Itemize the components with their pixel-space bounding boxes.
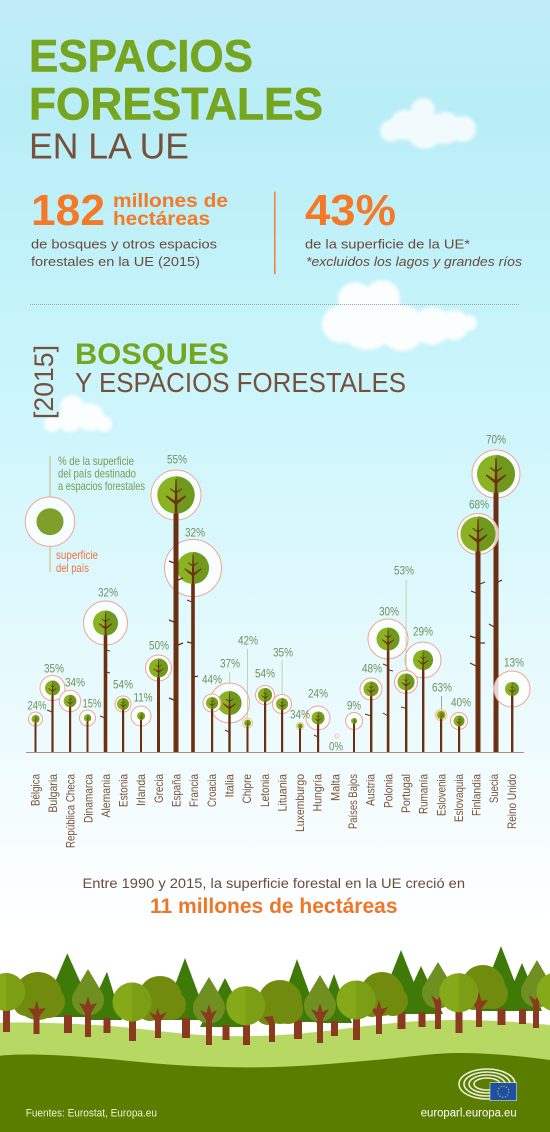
tree: Francia bbox=[164, 526, 222, 752]
tree: Malta bbox=[329, 734, 343, 754]
tree: Dinamarca bbox=[80, 696, 102, 752]
title: ESPACIOS bbox=[29, 31, 253, 82]
teardrop trees bbox=[72, 960, 550, 1024]
country labels: Malta bbox=[328, 774, 342, 801]
country labels: Eslovaquia bbox=[452, 774, 466, 822]
tree: Irlanda: 11% bbox=[134, 690, 153, 704]
country labels: Irlanda bbox=[134, 774, 148, 806]
tree: Dinamarca: 15% bbox=[82, 696, 102, 710]
country labels: Bélgica bbox=[28, 774, 42, 806]
chart: forest area by country bbox=[26, 432, 530, 754]
tree: Suecia bbox=[472, 432, 520, 752]
legend: del país destinado bbox=[58, 467, 136, 481]
tree: Alemania bbox=[84, 586, 128, 752]
stat: 182 millones: hectáreas bbox=[113, 209, 210, 230]
legend: del país bbox=[56, 561, 89, 575]
stat: 182 millones: 182 bbox=[31, 186, 105, 235]
cloud: middle bbox=[322, 280, 477, 351]
tree: Bélgica: 24% bbox=[28, 698, 47, 712]
tree: Letonia bbox=[255, 666, 275, 752]
country labels: Lituania bbox=[275, 774, 289, 812]
country labels: Rumanía bbox=[417, 774, 431, 814]
country labels: Croacia bbox=[205, 774, 219, 807]
country labels: Suecia bbox=[487, 774, 501, 803]
tree: Eslovaquia: 40% bbox=[451, 696, 471, 710]
country labels: Francia bbox=[187, 774, 201, 807]
tree: Austria bbox=[360, 662, 382, 752]
tree: Letonia: 54% bbox=[255, 666, 275, 680]
tree: Finlandia: 68% bbox=[469, 498, 489, 512]
legend bbox=[25, 454, 145, 575]
tree: Francia: 32% bbox=[185, 526, 205, 540]
tree: Finlandia bbox=[458, 498, 498, 752]
divider between stats bbox=[274, 192, 276, 274]
legend: superficie bbox=[56, 548, 98, 562]
tree: Rumanía bbox=[405, 624, 441, 752]
tree: Eslovaquia bbox=[450, 696, 471, 752]
tree: Lituania: 35% bbox=[273, 646, 293, 660]
tree: Rumanía: 29% bbox=[413, 624, 433, 638]
country labels: España bbox=[170, 774, 184, 807]
tree: Estonia: 54% bbox=[113, 678, 133, 692]
country labels: Dinamarca bbox=[81, 774, 95, 823]
tree: Portugal: 53% bbox=[394, 564, 414, 578]
stat: 182 millones: millones de bbox=[113, 191, 228, 212]
tree: Países Bajos: 9% bbox=[347, 698, 361, 712]
tree: República Checa bbox=[59, 676, 85, 752]
year label: [2015] bbox=[29, 345, 59, 419]
tree: Grecia bbox=[146, 638, 172, 752]
branched trunks bbox=[28, 992, 539, 1045]
logo: European Parliament bbox=[459, 1069, 517, 1101]
dark green ground bbox=[0, 1053, 550, 1132]
tree: Polonia bbox=[368, 604, 408, 752]
conifers bbox=[40, 946, 542, 1040]
country labels: Hungría bbox=[311, 774, 325, 812]
tree: Luxemburgo bbox=[290, 708, 310, 752]
white band behind forest bbox=[0, 935, 550, 1132]
country labels: Reino Unido bbox=[505, 774, 519, 829]
tree: Suecia: 70% bbox=[486, 432, 506, 446]
tree: Chipre: 42% bbox=[238, 634, 258, 648]
tree: Lituania bbox=[272, 646, 293, 752]
stat: 43% bbox=[305, 186, 523, 269]
tree: Países Bajos bbox=[346, 698, 362, 752]
tree: Polonia: 30% bbox=[379, 604, 399, 618]
tree: Croacia bbox=[202, 672, 222, 752]
tree: Grecia: 50% bbox=[149, 638, 169, 652]
country labels: Estonia bbox=[117, 774, 131, 807]
stat: 182 millones: de bosques y otros espacios bbox=[31, 236, 218, 251]
tree: Luxemburgo: 34% bbox=[290, 708, 310, 722]
country labels: Bulgaria bbox=[46, 774, 60, 813]
tree: Austria: 48% bbox=[362, 662, 382, 676]
growth statement bbox=[82, 876, 465, 918]
country labels: Países Bajos bbox=[346, 774, 360, 829]
tree: España bbox=[151, 452, 201, 752]
stat: 182 millones bbox=[31, 186, 228, 269]
country labels: Chipre bbox=[240, 774, 254, 804]
stat: 43%: de la superficie de la UE* bbox=[305, 236, 470, 251]
country labels: Grecia bbox=[152, 774, 166, 803]
country labels: Portugal bbox=[399, 774, 413, 813]
tree: Eslovenia bbox=[432, 680, 452, 752]
tree: Croacia: 44% bbox=[202, 672, 222, 686]
tree: Bulgaria: 35% bbox=[44, 662, 64, 676]
country labels bbox=[28, 774, 519, 848]
country labels: Austria bbox=[364, 774, 378, 806]
tree: Hungría bbox=[306, 686, 330, 752]
tree: España: 55% bbox=[167, 452, 187, 466]
website: europarl.europa.eu bbox=[421, 1108, 517, 1120]
tree: Reino Unido bbox=[494, 656, 530, 752]
country labels: Italia bbox=[222, 774, 236, 798]
legend: a espacios forestales bbox=[58, 479, 145, 493]
round olive trees bbox=[13, 965, 508, 1025]
tree: Italia bbox=[210, 656, 250, 752]
stat: 43%: 43% bbox=[305, 186, 396, 235]
sources: Fuentes: Eurostat, Europa.eu bbox=[26, 1108, 157, 1120]
title bbox=[29, 31, 323, 129]
cloud: top right bbox=[380, 98, 476, 149]
tree: Bulgaria bbox=[40, 662, 65, 752]
country labels: Finlandia bbox=[470, 774, 484, 816]
tree: Irlanda bbox=[131, 690, 153, 752]
country labels: Alemania bbox=[99, 774, 113, 818]
tree: Estonia bbox=[113, 678, 133, 752]
tree: Italia: 37% bbox=[220, 656, 240, 670]
tree: Alemania: 32% bbox=[98, 586, 118, 600]
tree: Hungría: 24% bbox=[308, 686, 328, 700]
section heading bbox=[75, 338, 406, 398]
tree: Eslovenia: 63% bbox=[432, 680, 452, 694]
cloud: left bbox=[44, 395, 112, 432]
tree: Bélgica bbox=[28, 698, 47, 752]
lime round trees bbox=[0, 972, 550, 1045]
growth statement: 11 millones de hectáreas bbox=[150, 895, 398, 918]
subtitle: EN LA UE bbox=[29, 125, 189, 166]
title: FORESTALES bbox=[29, 78, 323, 129]
stat: 182 millones: forestales en la UE (2015) bbox=[31, 254, 200, 269]
stat: 43%: *excluidos los lagos y grandes ríos bbox=[306, 254, 523, 269]
country labels: República Checa bbox=[64, 774, 78, 848]
tree: Chipre bbox=[238, 634, 258, 752]
section heading: Y ESPACIOS FORESTALES bbox=[75, 367, 406, 398]
tree: Reino Unido: 13% bbox=[504, 656, 524, 670]
country labels: Luxemburgo bbox=[293, 774, 307, 832]
tree: Portugal bbox=[394, 564, 418, 752]
section heading: BOSQUES bbox=[75, 338, 229, 371]
tree: Malta: 0% bbox=[329, 740, 343, 754]
country labels: Polonia bbox=[381, 774, 395, 808]
growth statement: Entre 1990 y 2015, la superficie forestal en la UE creció en bbox=[82, 876, 465, 891]
legend: % de la superficie bbox=[58, 454, 134, 468]
country labels: Eslovenia bbox=[434, 774, 448, 816]
light green hill bbox=[0, 1020, 550, 1132]
country labels: Letonia bbox=[258, 774, 272, 807]
tree: República Checa: 34% bbox=[65, 676, 85, 690]
